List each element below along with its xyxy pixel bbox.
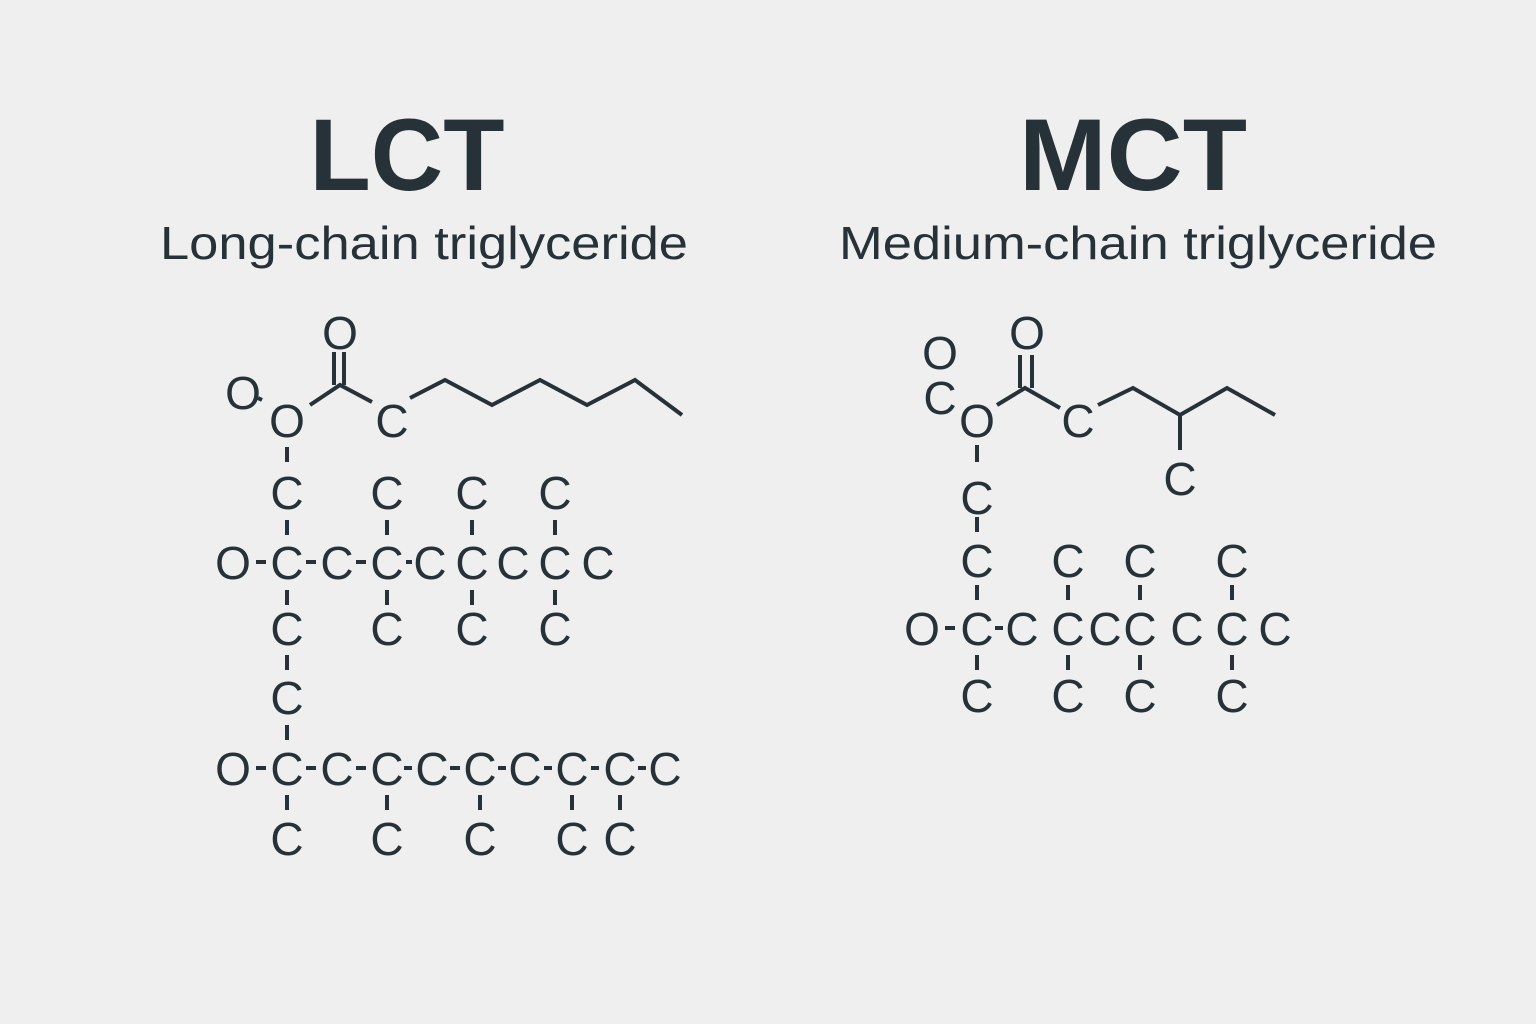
structure: LCT molecule: C (581, 537, 615, 589)
structure: LCT molecule: C (370, 537, 404, 589)
structure: MCT molecule: C (1215, 535, 1249, 587)
structure: MCT molecule: C (960, 535, 994, 587)
structure: MCT molecule: C (1005, 603, 1039, 655)
structure: LCT molecule: O (215, 537, 251, 589)
structure: MCT molecule: C (1123, 535, 1157, 587)
structure: LCT molecule (215, 307, 682, 865)
structure: LCT molecule: C (463, 743, 497, 795)
structure: LCT molecule: C (538, 537, 572, 589)
title: LCT: LCT (310, 98, 504, 212)
structure: MCT molecule: C (1163, 453, 1197, 505)
structure: MCT molecule: C (960, 670, 994, 722)
structure: LCT molecule: C (375, 395, 409, 447)
title: MCT: MCT (1019, 98, 1247, 212)
structure: LCT molecule: O (269, 395, 305, 447)
structure: MCT molecule: O (1009, 307, 1045, 359)
structure: LCT molecule: C (455, 603, 489, 655)
structure: LCT molecule: C (270, 672, 304, 724)
structure: MCT molecule: C (1088, 603, 1122, 655)
structure: MCT molecule: C (1215, 603, 1249, 655)
structure: LCT molecule: C (320, 537, 354, 589)
structure: LCT molecule: C (370, 743, 404, 795)
structure: MCT molecule: C (1123, 603, 1157, 655)
structure: LCT molecule: C (370, 603, 404, 655)
structure: LCT molecule: C (270, 537, 304, 589)
structure: LCT molecule: C (270, 603, 304, 655)
structure: LCT molecule: C (555, 813, 589, 865)
structure: MCT molecule: C (1051, 670, 1085, 722)
structure: LCT molecule: O (225, 367, 261, 419)
structure: LCT molecule: C (455, 537, 489, 589)
structure: MCT molecule: O (922, 327, 958, 379)
structure: MCT molecule (904, 307, 1292, 722)
structure: LCT molecule: C (603, 743, 637, 795)
structure: LCT molecule: C (538, 467, 572, 519)
structure: LCT molecule: C (270, 813, 304, 865)
structure: MCT molecule: O (959, 395, 995, 447)
structure: MCT molecule: C (923, 372, 957, 424)
structure: LCT molecule: C (538, 603, 572, 655)
structure: LCT molecule: C (370, 813, 404, 865)
structure: LCT molecule: C (496, 537, 530, 589)
structure: MCT molecule: C (1170, 603, 1204, 655)
structure: MCT molecule: C (960, 603, 994, 655)
structure: MCT molecule: C (1123, 670, 1157, 722)
structure: LCT molecule: O (215, 743, 251, 795)
structure: MCT molecule: C (960, 472, 994, 524)
structure: LCT molecule: C (270, 467, 304, 519)
structure: LCT molecule: O (322, 307, 358, 359)
subtitle: Medium-chain triglyceride: Medium-chain triglyceride (839, 217, 1437, 269)
structure: MCT molecule: C (1051, 535, 1085, 587)
structure: LCT molecule: C (413, 537, 447, 589)
structure: LCT molecule: C (415, 743, 449, 795)
structure: MCT molecule: C (1215, 670, 1249, 722)
structure: MCT molecule: C (1258, 603, 1292, 655)
subtitle: Long-chain triglyceride: Long-chain triglyceride (160, 217, 688, 269)
structure: LCT molecule: C (555, 743, 589, 795)
structure: MCT molecule: C (1051, 603, 1085, 655)
structure: LCT molecule: C (463, 813, 497, 865)
structure: LCT molecule: C (270, 743, 304, 795)
structure: MCT molecule: C (1061, 395, 1095, 447)
structure: LCT molecule: C (370, 467, 404, 519)
structure: MCT molecule: O (904, 603, 940, 655)
structure: LCT molecule: C (455, 467, 489, 519)
structure: LCT molecule: C (603, 813, 637, 865)
structure: LCT molecule: C (508, 743, 542, 795)
structure: LCT molecule: C (320, 743, 354, 795)
structure: LCT molecule: C (648, 743, 682, 795)
